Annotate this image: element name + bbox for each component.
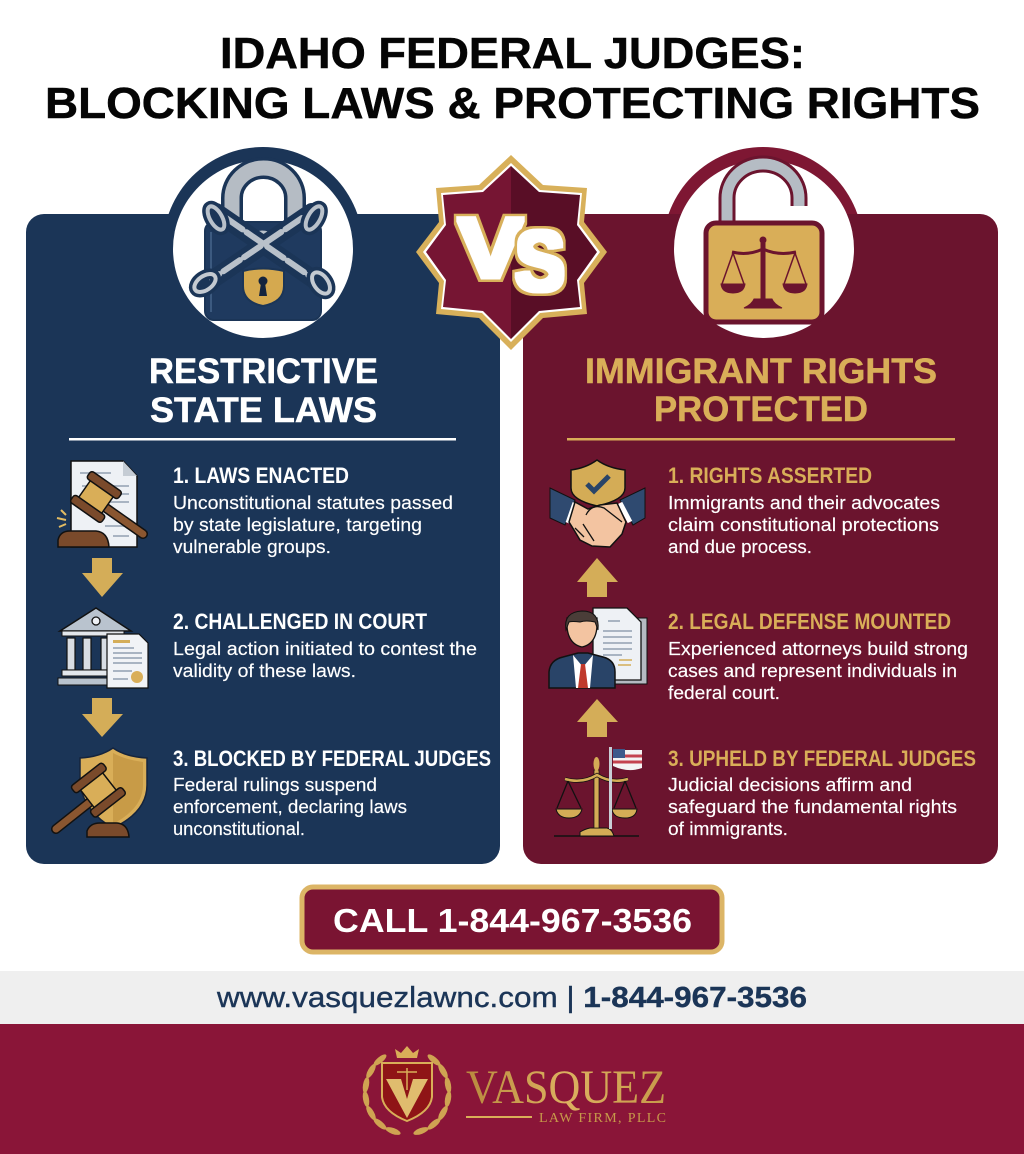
panel heading (585, 352, 937, 429)
icon: scales with flag (554, 747, 642, 836)
VS letters: V (458, 201, 523, 295)
step 2 text: validity of these laws. (173, 661, 356, 681)
step 3: blocked by federal judges (173, 746, 491, 839)
title (45, 29, 980, 128)
step 1 text (173, 493, 453, 557)
arrow down (82, 558, 123, 597)
logo: Vasquez Law Firm (362, 1046, 666, 1137)
panel heading: RESTRICTIVE (149, 352, 378, 391)
panel heading: IMMIGRANT RIGHTS (585, 352, 937, 391)
step 1 text: vulnerable groups. (173, 537, 331, 557)
step 2: challenged in court (173, 609, 477, 681)
step 1 text: Unconstitutional statutes passed (173, 493, 453, 513)
contact strip: www.vasquezlawnc.com | 1-844-967-3536 (216, 982, 807, 1014)
call button (302, 887, 722, 952)
panel: restrictive state laws (26, 147, 500, 864)
icon: shield and handshake (550, 460, 645, 547)
step 1: rights asserted: 1. RIGHTS ASSERTED (668, 463, 872, 488)
step 3 text: Federal rulings suspend (173, 775, 377, 795)
icon: gavel and shield (56, 748, 147, 837)
icon: attorney with documents (549, 608, 647, 688)
icon: courthouse with document (58, 608, 148, 688)
panel heading (149, 352, 378, 430)
contact strip (0, 971, 1024, 1024)
step 3 text: enforcement, declaring laws (173, 797, 407, 817)
step 2: legal defense mounted (668, 609, 968, 703)
icon: gavel on document (57, 461, 143, 547)
step 2 text: cases and represent individuals in (668, 661, 957, 681)
title: BLOCKING LAWS & PROTECTING RIGHTS (45, 79, 980, 128)
step 2 text: federal court. (668, 683, 780, 703)
logo crest (362, 1046, 452, 1137)
step 3 text: Judicial decisions affirm and (668, 775, 912, 795)
step 3: upheld by federal judges: 3. UPHELD BY FEDERAL JUDGES (668, 746, 976, 771)
logo wordmark: LAW FIRM, PLLC (539, 1111, 666, 1126)
step 3 text: unconstitutional. (173, 819, 305, 839)
step 2 text (668, 639, 968, 703)
step 1 text: and due process. (668, 537, 812, 557)
footer band (0, 1024, 1024, 1154)
step 3 text: safeguard the fundamental rights (668, 797, 957, 817)
step 2: challenged in court: 2. CHALLENGED IN COURT (173, 609, 427, 634)
step 1: rights asserted (668, 463, 940, 557)
panel heading: PROTECTED (654, 390, 868, 429)
step 1 text: claim constitutional protections (668, 515, 939, 535)
VS letters (458, 201, 565, 308)
step 2 text: Legal action initiated to contest the (173, 639, 477, 659)
step 1 text (668, 493, 940, 557)
arrow up (577, 699, 618, 737)
panel heading: STATE LAWS (150, 391, 377, 430)
logo wordmark: VASQUEZ (466, 1061, 666, 1114)
icon: open padlock with scales (674, 160, 854, 338)
step 3: upheld by federal judges (668, 746, 976, 839)
step 2 text: Experienced attorneys build strong (668, 639, 968, 659)
step 1: laws enacted: 1. LAWS ENACTED (173, 463, 349, 488)
step 3: blocked by federal judges: 3. BLOCKED BY FEDERAL JUDGES (173, 746, 491, 771)
step 1 text: by state legislature, targeting (173, 515, 422, 535)
arrow up (577, 558, 618, 597)
arrow down (82, 698, 123, 737)
step 2 text (173, 639, 477, 681)
panel: immigrant rights protected (523, 147, 998, 864)
call button: CALL 1-844-967-3536 (333, 902, 692, 939)
step 3 text (173, 775, 407, 839)
VS badge (416, 155, 607, 350)
icon: chained padlock (173, 160, 353, 338)
step 3 text (668, 775, 957, 839)
step 3 text: of immigrants. (668, 819, 788, 839)
step 1 text: Immigrants and their advocates (668, 493, 940, 513)
step 2: legal defense mounted: 2. LEGAL DEFENSE MOUNTED (668, 609, 951, 634)
VS letters: S (515, 214, 565, 308)
title: IDAHO FEDERAL JUDGES: (220, 29, 805, 78)
step 1: laws enacted (173, 463, 453, 557)
